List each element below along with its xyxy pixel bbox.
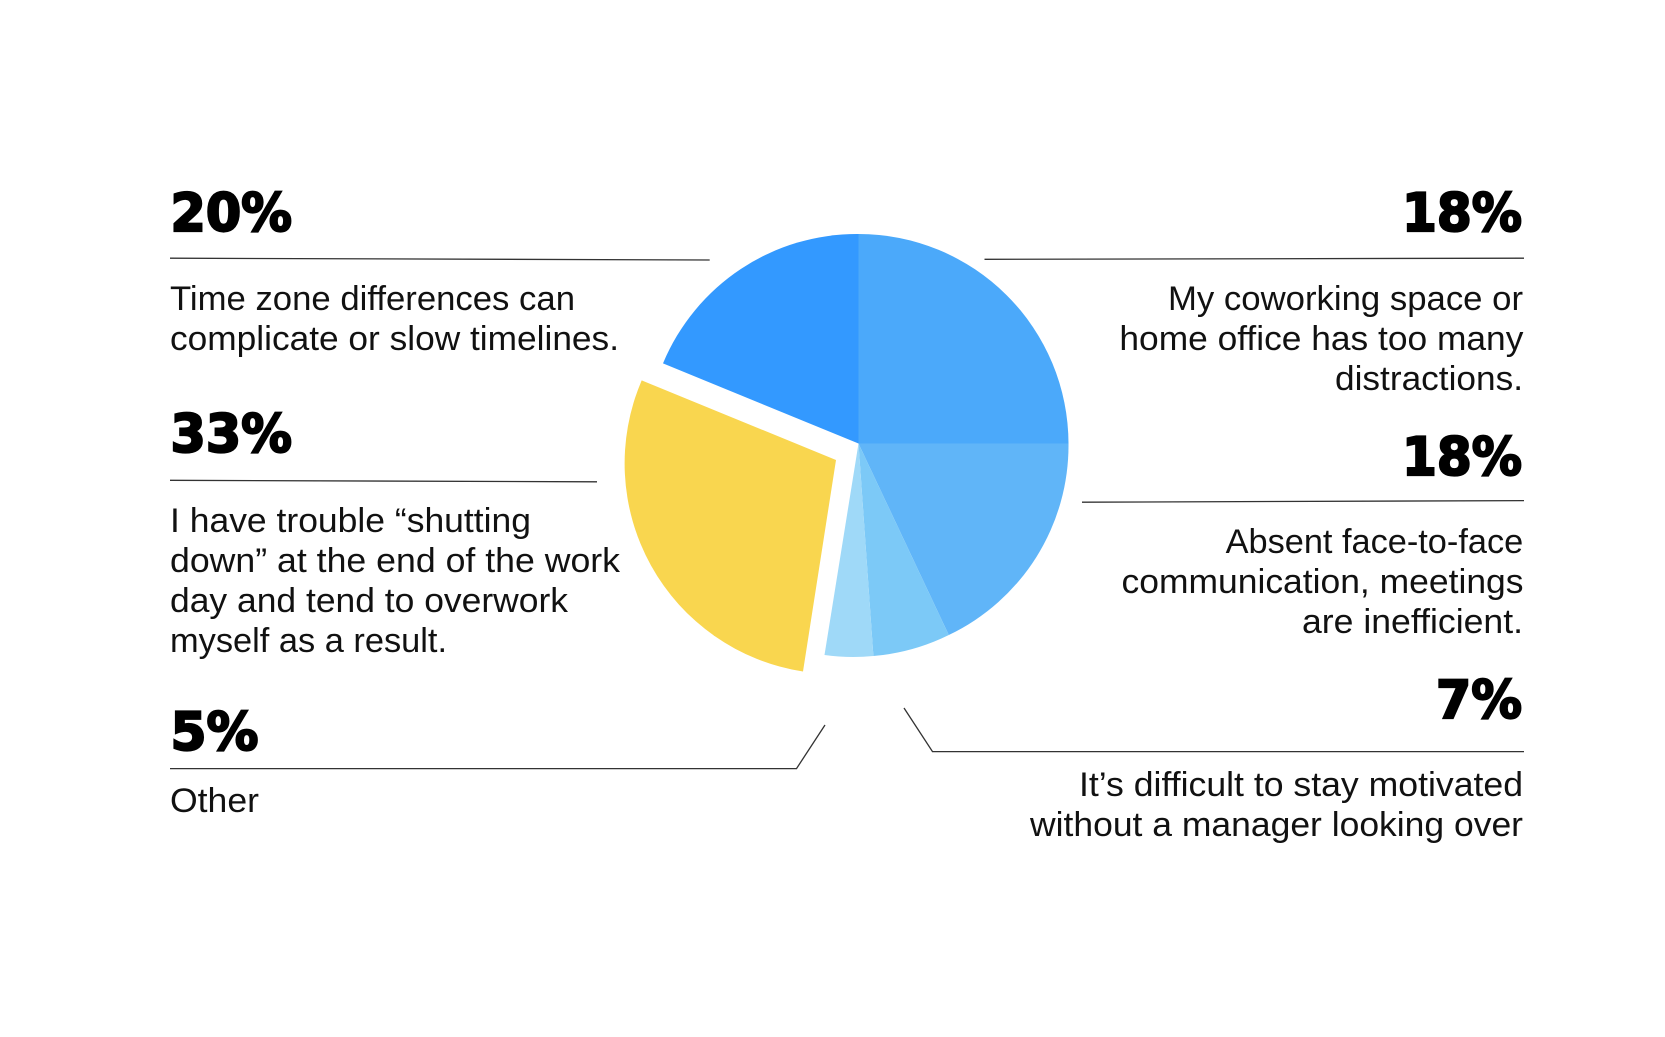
percentage: 18% bbox=[1402, 183, 1522, 244]
description: Time zone differences can bbox=[170, 280, 575, 318]
slice: 5% other bbox=[824, 444, 873, 657]
callout: 18% distractions bbox=[984, 183, 1524, 398]
description: communication, meetings bbox=[1122, 563, 1524, 601]
description: It’s difficult to stay motivated bbox=[1079, 766, 1523, 804]
description: My coworking space or bbox=[1168, 280, 1523, 318]
callout: 5% other bbox=[170, 702, 825, 820]
callout: 33% overwork bbox=[170, 404, 621, 660]
description: Absent face-to-face bbox=[1226, 523, 1523, 561]
description bbox=[1122, 523, 1524, 641]
description: distractions. bbox=[1335, 360, 1523, 398]
percentage: 5% bbox=[170, 702, 258, 763]
description: are inefficient. bbox=[1302, 603, 1523, 641]
slice: 18% distractions bbox=[858, 234, 1068, 444]
slice: 7% motivation bbox=[858, 444, 949, 656]
leader line bbox=[170, 725, 825, 769]
slice: 18% face-to-face bbox=[858, 444, 1069, 635]
description: down” at the end of the work bbox=[170, 542, 621, 580]
description: complicate or slow timelines. bbox=[170, 320, 619, 358]
description: I have trouble “shutting bbox=[170, 502, 531, 540]
percentage: 18% bbox=[1402, 427, 1522, 488]
callout: 20% time zones bbox=[170, 183, 710, 358]
callout: 18% face-to-face bbox=[1082, 427, 1524, 641]
description bbox=[1029, 766, 1523, 844]
description bbox=[170, 502, 621, 660]
description: without a manager looking over bbox=[1029, 806, 1523, 844]
description: day and tend to overwork bbox=[170, 582, 569, 620]
callout: 7% motivation bbox=[904, 670, 1524, 844]
percentage: 7% bbox=[1436, 670, 1522, 731]
description: home office has too many bbox=[1119, 320, 1523, 358]
description: myself as a result. bbox=[170, 622, 447, 660]
slice: 33% overwork (exploded) bbox=[625, 380, 836, 672]
description bbox=[170, 280, 619, 358]
percentage: 20% bbox=[170, 183, 292, 244]
slice: 20% time zones bbox=[663, 234, 858, 444]
leader line bbox=[904, 708, 1524, 752]
description: Other bbox=[170, 782, 259, 820]
percentage: 33% bbox=[170, 404, 292, 465]
pie chart bbox=[625, 234, 1069, 671]
description bbox=[1119, 280, 1523, 398]
